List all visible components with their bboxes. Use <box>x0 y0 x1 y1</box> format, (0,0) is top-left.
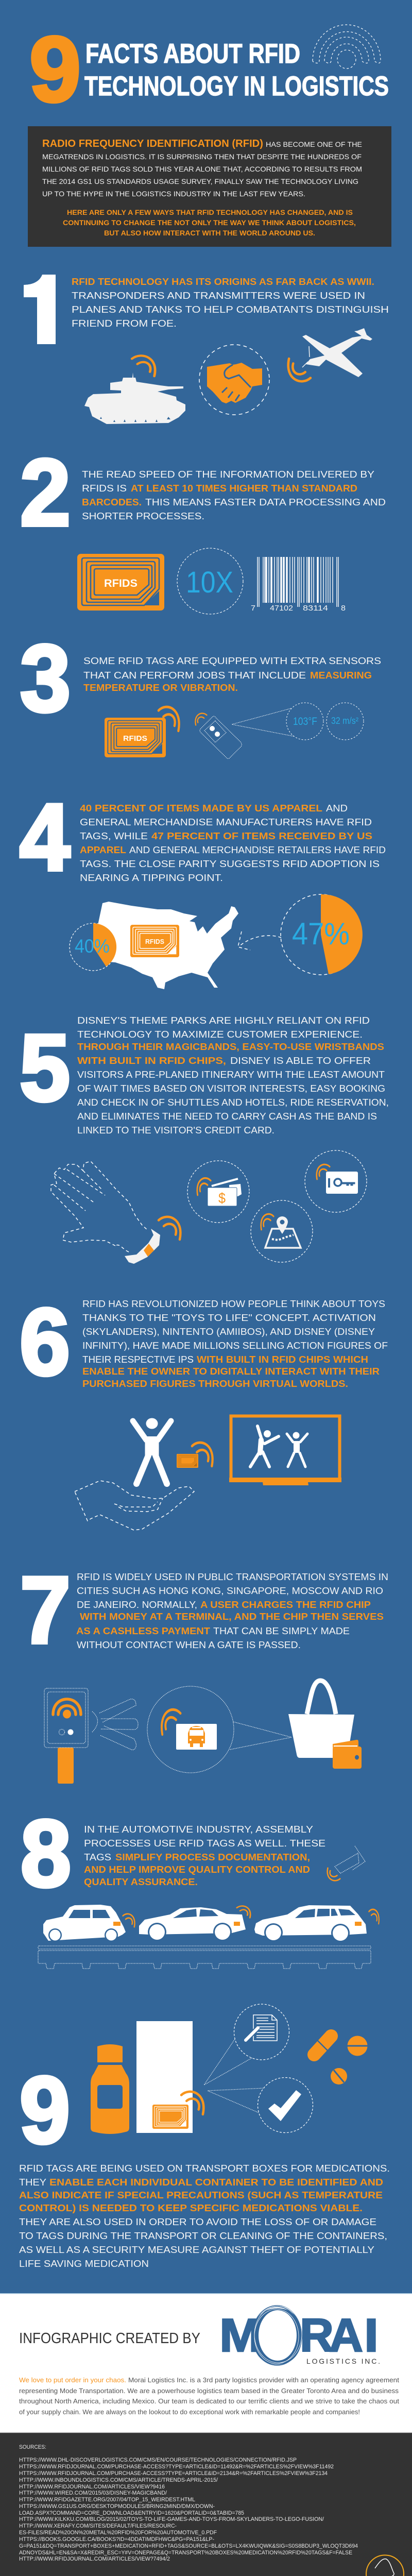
fact 9 text: ENABLE EACH INDIVIDUAL CONTAINER TO BE IDENTIFIED AND <box>49 2177 383 2188</box>
fact 1 text: TRANSPONDERS AND TRANSMITTERS WERE USED IN <box>72 290 365 301</box>
fact 6 text: THEIR RESPECTIVE IPS <box>82 1354 194 1365</box>
icon: map pin in dashed circle <box>251 1200 313 1262</box>
sources list: HTTP://WWW.RFIDGAZETTE.ORG/2007/04/TOP_15_WEIRDEST.HTML <box>19 2497 195 2503</box>
icon: barcode <box>251 557 346 613</box>
panel: sources footer <box>0 2432 412 2576</box>
pointer lines to bag <box>230 1722 291 1750</box>
fact 3 text: SOME RFID TAGS ARE EQUIPPED WITH EXTRA SENSORS <box>83 655 381 666</box>
fact 9 text <box>19 2163 390 2269</box>
icon: checkmark in dashed bubble <box>208 2077 313 2133</box>
sources list: ADNOYDS&HL=EN&SA=X&REDIR_ESC=Y#V=ONEPAGE&Q=TRANSPORT%20BOXES%20MEDICATION%20RFID%20TAGS&F=FALSE <box>19 2550 352 2556</box>
icon: car three <box>254 1905 379 1942</box>
fact 4 text: TAGS, WHILE <box>80 831 148 841</box>
fact 5 text: DISNEY'S THEME PARKS ARE HIGHLY RELIANT ON RFID <box>77 1015 370 1026</box>
title line one: FACTS ABOUT RFID <box>85 39 300 69</box>
icon: barcode: 8 <box>341 604 346 613</box>
icon: screen with figures <box>229 1416 341 1485</box>
logo: Morai Logistics: A <box>329 2310 363 2362</box>
icon: bus card in dotted circle <box>147 1686 234 1773</box>
sources list: HTTP://WWW.RFIDJOURNAL.COM/ARTICLES/VIEW?7494/2 <box>19 2556 170 2562</box>
icon: car one <box>43 1905 135 1942</box>
icon: document in dashed bubble <box>204 2004 289 2085</box>
intro paragraph: HAS BECOME ONE OF THE <box>266 140 362 148</box>
number 7: 7 <box>20 1557 71 1663</box>
icon: dotted conveyor <box>38 1946 371 1969</box>
fact 8 text: SIMPLIFY PROCESS DOCUMENTATION, <box>115 1852 310 1862</box>
number 8: 8 <box>21 1800 71 1906</box>
icon: plane signal <box>288 359 311 381</box>
fact 7 text: WITHOUT CONTACT WHEN A GATE IS PASSED. <box>77 1639 301 1650</box>
icon: barcode: 83114 <box>303 604 328 613</box>
fact 4 text: 40 PERCENT OF ITEMS MADE BY US APPAREL <box>80 803 322 814</box>
logo: Morai Logistics: LOGISTICS INC. <box>306 2357 380 2365</box>
icon: barcode: 47102 <box>270 604 293 613</box>
sources list: ES-FILES/READ%20ON%20METAL%20RFID%20FOR%20AUTOMOTIVE_0.PDF <box>19 2530 217 2536</box>
fact 5 text <box>77 1015 389 1136</box>
fact 3 text: THAT CAN PERFORM JOBS THAT INCLUDE <box>83 670 306 681</box>
fact 7 text: AS A CASHLESS PAYMENT <box>76 1625 211 1636</box>
icon: RFID tag <box>77 554 164 611</box>
company description: We love to put order in your chaos. <box>19 2377 126 2384</box>
fact 5 text: OF WAIT TIMES BASED ON VISITOR INTERESTS, EASY BOOKING <box>77 1083 385 1094</box>
panel: introduction <box>28 126 391 247</box>
logo: Morai Logistics <box>219 2292 380 2381</box>
sources list: SOURCES: <box>19 2444 46 2450</box>
fact 3 text: TEMPERATURE OR VIBRATION. <box>83 682 238 693</box>
fact 7 text: DE JANEIRO. NORMALLY, <box>77 1599 197 1610</box>
fact 6 text: WITH BUILT IN RFID CHIPS WHICH <box>197 1354 368 1365</box>
arrow: dashed from pie to map <box>238 931 281 950</box>
fact 4 text: AND GENERAL MERCHANDISE RETAILERS HAVE RFID <box>129 844 386 855</box>
icon: terminal beams <box>92 1699 138 1750</box>
fact 4 text: GENERAL MERCHANDISE MANUFACTURERS HAVE RFID <box>80 817 372 827</box>
icon: jumping figure <box>133 1418 171 1484</box>
icon: dashed signal arches <box>313 25 381 69</box>
intro orange callout: CONTINUING TO CHANGE THE NOT ONLY THE WAY WE THINK ABOUT LOGISTICS, <box>63 218 356 227</box>
sources list: HTTP://WWW.INBOUNDLOGISTICS.COM/CMS/ARTICLE/TRENDS-APRIL-2015/ <box>19 2477 218 2483</box>
fact 5 <box>20 1014 389 1264</box>
fact 6 text: ENABLE THE OWNER TO DIGITALLY INTERACT WITH THEIR <box>82 1366 380 1377</box>
fact 8 text: TAGS <box>84 1852 111 1862</box>
fact 1 text: FRIEND FROM FOE. <box>72 318 177 329</box>
icon: dashed wave mat <box>75 1481 194 1530</box>
company description: representing Mode Transportation. We are a powerhouse logistics team based in the Greater Toronto Area and do business <box>19 2387 399 2395</box>
icon: payment terminal <box>44 1688 88 1784</box>
number 2: 2 <box>20 439 71 545</box>
fact 4 text: APPAREL <box>80 844 126 855</box>
icon: shopping bag <box>288 1681 354 1758</box>
sources list: HTTPS://WWW.DHL-DISCOVERLOGISTICS.COM/CMS/EN/COURSE/TECHNOLOGIES/CONNECTION/RFID.JSP <box>19 2457 297 2463</box>
fact 4 text <box>80 803 386 883</box>
icon: RFID tag with signal: RFIDS <box>123 734 147 743</box>
number 1 <box>24 275 56 344</box>
fact 3 text <box>83 655 381 693</box>
icon: barcode: 7 <box>251 604 255 613</box>
logo: Morai Logistics: R <box>300 2310 334 2362</box>
panel: company credit <box>0 2292 412 2432</box>
fact 2 text: AT LEAST 10 TIMES HIGHER THAN STANDARD <box>131 483 357 494</box>
fact 6 text: PURCHASED FIGURES THROUGH VIRTUAL WORLDS. <box>82 1378 348 1389</box>
fact 7 text <box>76 1571 388 1650</box>
sources list: G=PA151&DQ=TRANSPORT+BOXES+MEDICATION+RFID+TAGS&SOURCE=BL&OTS=LX4KWUIQWK&SIG=S0S8BDUP3_WLOQT3D694 <box>19 2543 358 2549</box>
intro paragraph: MEGATRENDS IN LOGISTICS. IT IS SURPRISING THEN THAT DESPITE THE HUNDREDS OF <box>42 152 362 161</box>
fact 2 <box>20 439 386 614</box>
pie: 40 percent: 40% <box>75 936 110 957</box>
10X comparison circle <box>177 548 243 614</box>
intro paragraph: UP TO THE HYPE IN THE LOGISTICS INDUSTRY IN THE LAST FEW YEARS. <box>42 190 305 198</box>
fact 4 text: 47 PERCENT OF ITEMS RECEIVED BY US <box>151 831 372 841</box>
fact 8 text: AND HELP IMPROVE QUALITY CONTROL AND <box>84 1864 310 1875</box>
fact 8 text: IN THE AUTOMOTIVE INDUSTRY, ASSEMBLY <box>84 1824 313 1835</box>
logo: Grilled Cheese Affairs <box>366 2555 404 2576</box>
fact 9 text: TO TAGS DURING THE TRANSPORT OR CLEANING OF THE CONTAINERS, <box>19 2230 387 2241</box>
intro paragraph: THE 2014 GS1 US STANDARDS USAGE SURVEY, FINALLY SAW THE TECHNOLOGY LIVING <box>42 177 358 185</box>
icon: tank <box>84 372 185 424</box>
fact 5 text: AND CHECK IN OF SHUTTLES AND HOTELS, RIDE RESERVATION, <box>77 1097 389 1108</box>
sensor readout circles: 103°F <box>293 716 317 727</box>
company description: throughout North America, including Mexico. Our team is dedicated to our terrific clients and we strive to take the chaos out <box>19 2398 400 2405</box>
number 9: 9 <box>20 2057 70 2163</box>
fact 5 text: DISNEY IS ABLE TO OFFER <box>230 1055 371 1066</box>
icon: RFID tag with signal <box>105 707 179 757</box>
intro paragraph: MILLIONS OF RFID TAGS SOLD THIS YEAR ALONE THAT, ACCORDING TO RESULTS FROM <box>42 165 362 173</box>
fact 7 text: A USER CHARGES THE RFID CHIP <box>200 1599 371 1610</box>
fact 9 text: AS WELL AS A SECURITY MEASURE AGAINST THEFT OF POTENTIALLY <box>19 2244 374 2255</box>
fact 6 text: RFID HAS REVOLUTIONIZED HOW PEOPLE THINK ABOUT TOYS <box>82 1298 385 1309</box>
number 4: 4 <box>20 784 70 890</box>
fact 2 text: THE READ SPEED OF THE INFORMATION DELIVERED BY <box>82 469 374 480</box>
fact 2 text: THIS MEANS FASTER DATA PROCESSING AND <box>145 497 386 507</box>
fact 6 text <box>82 1298 388 1389</box>
icon: RFID tag on map: RFIDS <box>145 938 164 945</box>
logo: Morai Logistics: I <box>364 2310 379 2362</box>
fact 5 text: VISITORS A PRE-PLANED ITINERARY WITH THE LEAST AMOUNT <box>77 1069 385 1080</box>
icon: pills <box>314 2036 368 2084</box>
fact 2 text: SHORTER PROCESSES. <box>82 511 204 521</box>
icon: medicine bottle <box>91 2044 129 2134</box>
company description <box>19 2377 400 2416</box>
fact 8 text <box>84 1824 325 1887</box>
fact 7 text: CITIES SUCH AS HONG KONG, SINGAPORE, MOSCOW AND RIO <box>77 1585 383 1596</box>
10X comparison circle: 10X <box>186 566 233 599</box>
fact 4 text: NEARING A TIPPING POINT. <box>80 872 223 883</box>
fact 9 text: CONTROL) IS NEEDED TO KEEP SPECIFIC MEDICATIONS VIABLE. <box>19 2202 363 2213</box>
fact 9 <box>19 2004 390 2269</box>
number 3: 3 <box>20 625 71 731</box>
fact 1 text <box>72 276 389 329</box>
intro orange callout: BUT ALSO HOW INTERACT WITH THE WORLD AROUND US. <box>104 229 315 237</box>
fact 9 text: LIFE SAVING MEDICATION <box>19 2258 149 2269</box>
sources list: HTTPS://WWW.GS1US.ORG/DESKTOPMODULES/BRING2MIND/DMX/DOWN- <box>19 2503 215 2510</box>
fact 5 text: LINKED TO THE VISITOR'S CREDIT CARD. <box>77 1125 274 1136</box>
sources list: HTTP://WWW.KILKKU.COM/BLOG/2015/02/TOYS-TO-LIFE-GAMES-AND-TOYS-FROM-SKYLANDERS-TO-LEGO-FUSION/ <box>19 2516 324 2522</box>
fact 7 text: WITH MONEY AT A TERMINAL, AND THE CHIP THEN SERVES <box>80 1611 384 1622</box>
fact 9 text: THEY <box>19 2177 46 2188</box>
pie: 47 percent: 47% <box>292 917 350 951</box>
title block <box>29 18 389 122</box>
fact 7 text: RFID IS WIDELY USED IN PUBLIC TRANSPORTATION SYSTEMS IN <box>77 1571 388 1582</box>
sensor readout circles <box>232 703 364 740</box>
icon: handshake in dashed circle <box>199 345 269 415</box>
icon: key card in dashed circle <box>305 1150 367 1212</box>
company description: of your supply chain. We are always on the lookout to do exceptional work with remarkable people and companies! <box>19 2409 360 2416</box>
fact 5 text: AND ELIMINATES THE NEED TO CARRY CASH AS THE BAND IS <box>77 1111 377 1122</box>
number 1: 1 <box>15 256 68 362</box>
fact 4 text: TAGS. THE CLOSE PARITY SUGGESTS RFID ADOPTION IS <box>80 858 380 869</box>
fact 4 <box>20 784 386 989</box>
company description: Morai Logistics Inc. is a 3rd party logistics provider with an operating agency agreement <box>128 2377 400 2384</box>
fact 4 text: AND <box>326 803 348 814</box>
intro paragraph <box>42 138 362 198</box>
icon: wallet <box>333 1740 362 1769</box>
map: United States <box>95 902 238 989</box>
fact 5 text: TECHNOLOGY TO MAXIMIZE CUSTOMER EXPERIENCE. <box>77 1029 363 1040</box>
pie: 40 percent <box>70 923 117 971</box>
icon: small RFID tag with signal <box>177 1443 213 1468</box>
fact 5 text: THROUGH THEIR MAGICBANDS, EASY-TO-USE WRISTBANDS <box>77 1041 384 1052</box>
sources list <box>19 2444 358 2562</box>
fact 2 text <box>82 469 386 521</box>
fact 1 text: RFID TECHNOLOGY HAS ITS ORIGINS AS FAR BACK AS WWII. <box>72 276 374 287</box>
fact 7 <box>20 1557 388 1784</box>
icon: tank signal <box>132 355 155 376</box>
fact 9 text: RFID TAGS ARE BEING USED ON TRANSPORT BOXES FOR MEDICATIONS. <box>19 2163 390 2174</box>
fact 6 <box>20 1289 388 1530</box>
sources list: LOAD.ASPX?COMMAND=CORE_DOWNLOAD&ENTRYID=1620&PORTALID=0&TABID=785 <box>19 2510 244 2516</box>
sources list: HTTP://WWW.RFIDJOURNAL.COM/ARTICLES/VIEW?9416 <box>19 2484 165 2490</box>
logo: Morai Logistics: O <box>250 2292 305 2381</box>
icon: sensor card <box>195 714 242 758</box>
icon: white box with RFID tag <box>136 2021 203 2133</box>
fact 1 text: PLANES AND TANKS TO HELP COMBATANTS DISTINGUISH <box>72 304 389 315</box>
sources list: HTTPS://WWW.RFIDJOURNAL.COM/PURCHASE-ACCESS?TYPE=ARTICLE&ID=2134&R=%2FARTICLES%2FVIEW%3F2134 <box>19 2470 328 2477</box>
fact 9 text: THEY ARE ALSO USED IN ORDER TO AVOID THE LOSS OF OR DAMAGE <box>19 2216 376 2227</box>
sources list: HTTP://WWW.XERAFY.COM/SITES/DEFAULT/FILES/RESOURC- <box>19 2523 177 2529</box>
fact 2 text: RFIDS IS <box>82 483 127 494</box>
logo: Morai Logistics: M <box>219 2310 262 2362</box>
sources list: HTTPS://WWW.RFIDJOURNAL.COM/PURCHASE-ACCESS?TYPE=ARTICLE&ID=11492&R=%2FARTICLES%2FVIEW%3F11492 <box>19 2464 334 2470</box>
fact 5 text: WITH BUILT IN RFID CHIPS, <box>77 1055 226 1066</box>
icon: dotted scanner <box>328 1846 365 1880</box>
icon: RFID tag: RFIDS <box>104 578 138 589</box>
icon: dashed hand with wristband <box>51 1161 180 1264</box>
sources list: HTTPS://BOOKS.GOOGLE.CA/BOOKS?ID=4DDATIMDFHWC&PG=PA151&LP- <box>19 2536 214 2543</box>
fact 6 text: THANKS TO THE "TOYS TO LIFE" CONCEPT. ACTIVATION <box>82 1312 376 1323</box>
icon: money in dashed circle <box>187 1161 249 1223</box>
fact 3 text: MEASURING <box>310 670 372 681</box>
sources list: HTTP://WWW.WIRED.COM/2015/03/DISNEY-MAGICBAND/ <box>19 2490 167 2496</box>
fact 8 <box>21 1800 379 1969</box>
icon: RFID tag on map <box>130 925 179 957</box>
fact 1 <box>24 275 388 424</box>
fact 7 text: THAT CAN BE SIMPLY MADE <box>213 1625 350 1636</box>
icon: plane <box>302 328 372 377</box>
pie: 47 percent <box>281 894 363 975</box>
fact 3 <box>20 625 381 758</box>
number 5: 5 <box>20 1014 70 1121</box>
fact 8 text: QUALITY ASSURANCE. <box>84 1876 198 1887</box>
intro orange callout <box>63 208 356 237</box>
number 6: 6 <box>20 1289 70 1395</box>
fact 8 text: PROCESSES USE RFID TAGS AS WELL. THESE <box>84 1838 325 1849</box>
fact 9 text: ALSO INDICATE IF SPECIAL PRECAUTIONS (SUCH AS TEMPERATURE <box>19 2190 383 2200</box>
fact 6 text: INFINITY), HAVE MADE MILLIONS SELLING ACTION FIGURES OF <box>82 1340 388 1351</box>
sensor readout circles: 32 m/s² <box>331 716 358 726</box>
heading: infographic created by: INFOGRAPHIC CREATED BY <box>19 2330 200 2347</box>
intro orange callout: HERE ARE ONLY A FEW WAYS THAT RFID TECHNOLOGY HAS CHANGED, AND IS <box>67 208 353 216</box>
icon: money in dashed circle: $ <box>218 1190 226 1206</box>
big orange nine: 9 <box>29 18 81 122</box>
icon: car two <box>139 1906 250 1941</box>
fact 6 text: (SKYLANDERS), NINTENTO (AMIIBOS), AND DISNEY (DISNEY <box>82 1326 375 1337</box>
intro paragraph: RADIO FREQUENCY IDENTIFICATION (RFID) <box>42 138 263 149</box>
fact 2 text: BARCODES. <box>82 497 142 507</box>
